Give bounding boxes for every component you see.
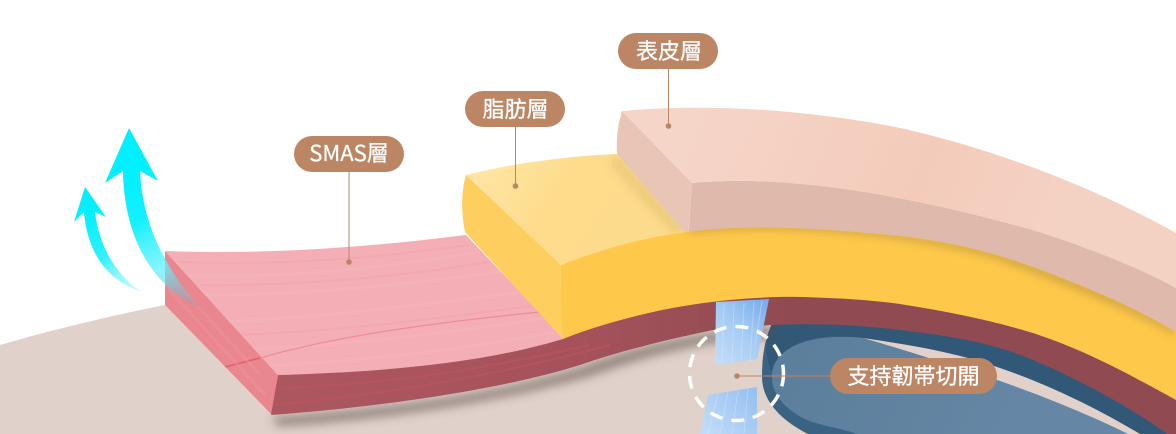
callout: skin layer: [618, 33, 718, 129]
skin layer: [617, 108, 1176, 345]
callout: SMAS layer: SMAS層: [309, 136, 389, 168]
callout: SMAS layer: [294, 136, 404, 265]
globe outer wall: [762, 317, 1176, 434]
skin front face: [688, 181, 1176, 345]
callout: fat layer: [465, 91, 565, 189]
fat side face: [462, 175, 563, 339]
fat top face: [466, 154, 700, 265]
shadow beneath muscle: [272, 326, 773, 426]
muscle front face: [271, 260, 1176, 434]
muscle fibre line: [260, 312, 540, 358]
globe inner body: [772, 337, 1128, 434]
dashed cut circle: [690, 326, 784, 420]
ligament: [700, 299, 769, 434]
ligament upper part: [715, 299, 769, 365]
muscle side face: [165, 251, 278, 415]
skin shadow on fat: [612, 158, 682, 232]
fat front face: [561, 222, 1176, 400]
skin top face: [622, 108, 1176, 288]
callout: ligament cut: 支持韌帯切開: [847, 359, 980, 391]
skin side face: [617, 111, 692, 236]
fat layer rear: [462, 154, 700, 339]
eye globe: [762, 317, 1176, 434]
background tissue base: [0, 300, 1176, 434]
muscle layer: [165, 235, 1176, 434]
globe beige wedge: [863, 338, 1140, 434]
large arrow: [105, 128, 200, 308]
globe dark upper band: [766, 317, 1176, 434]
ligament lower part: [700, 387, 757, 434]
blue arrows: [74, 128, 200, 308]
callout: ligament cut: [734, 358, 997, 394]
small arrow: [74, 187, 142, 292]
callout: fat layer: 脂肪層: [482, 92, 549, 124]
muscle top face: [165, 235, 565, 375]
callout: skin layer: 表皮層: [636, 34, 702, 66]
